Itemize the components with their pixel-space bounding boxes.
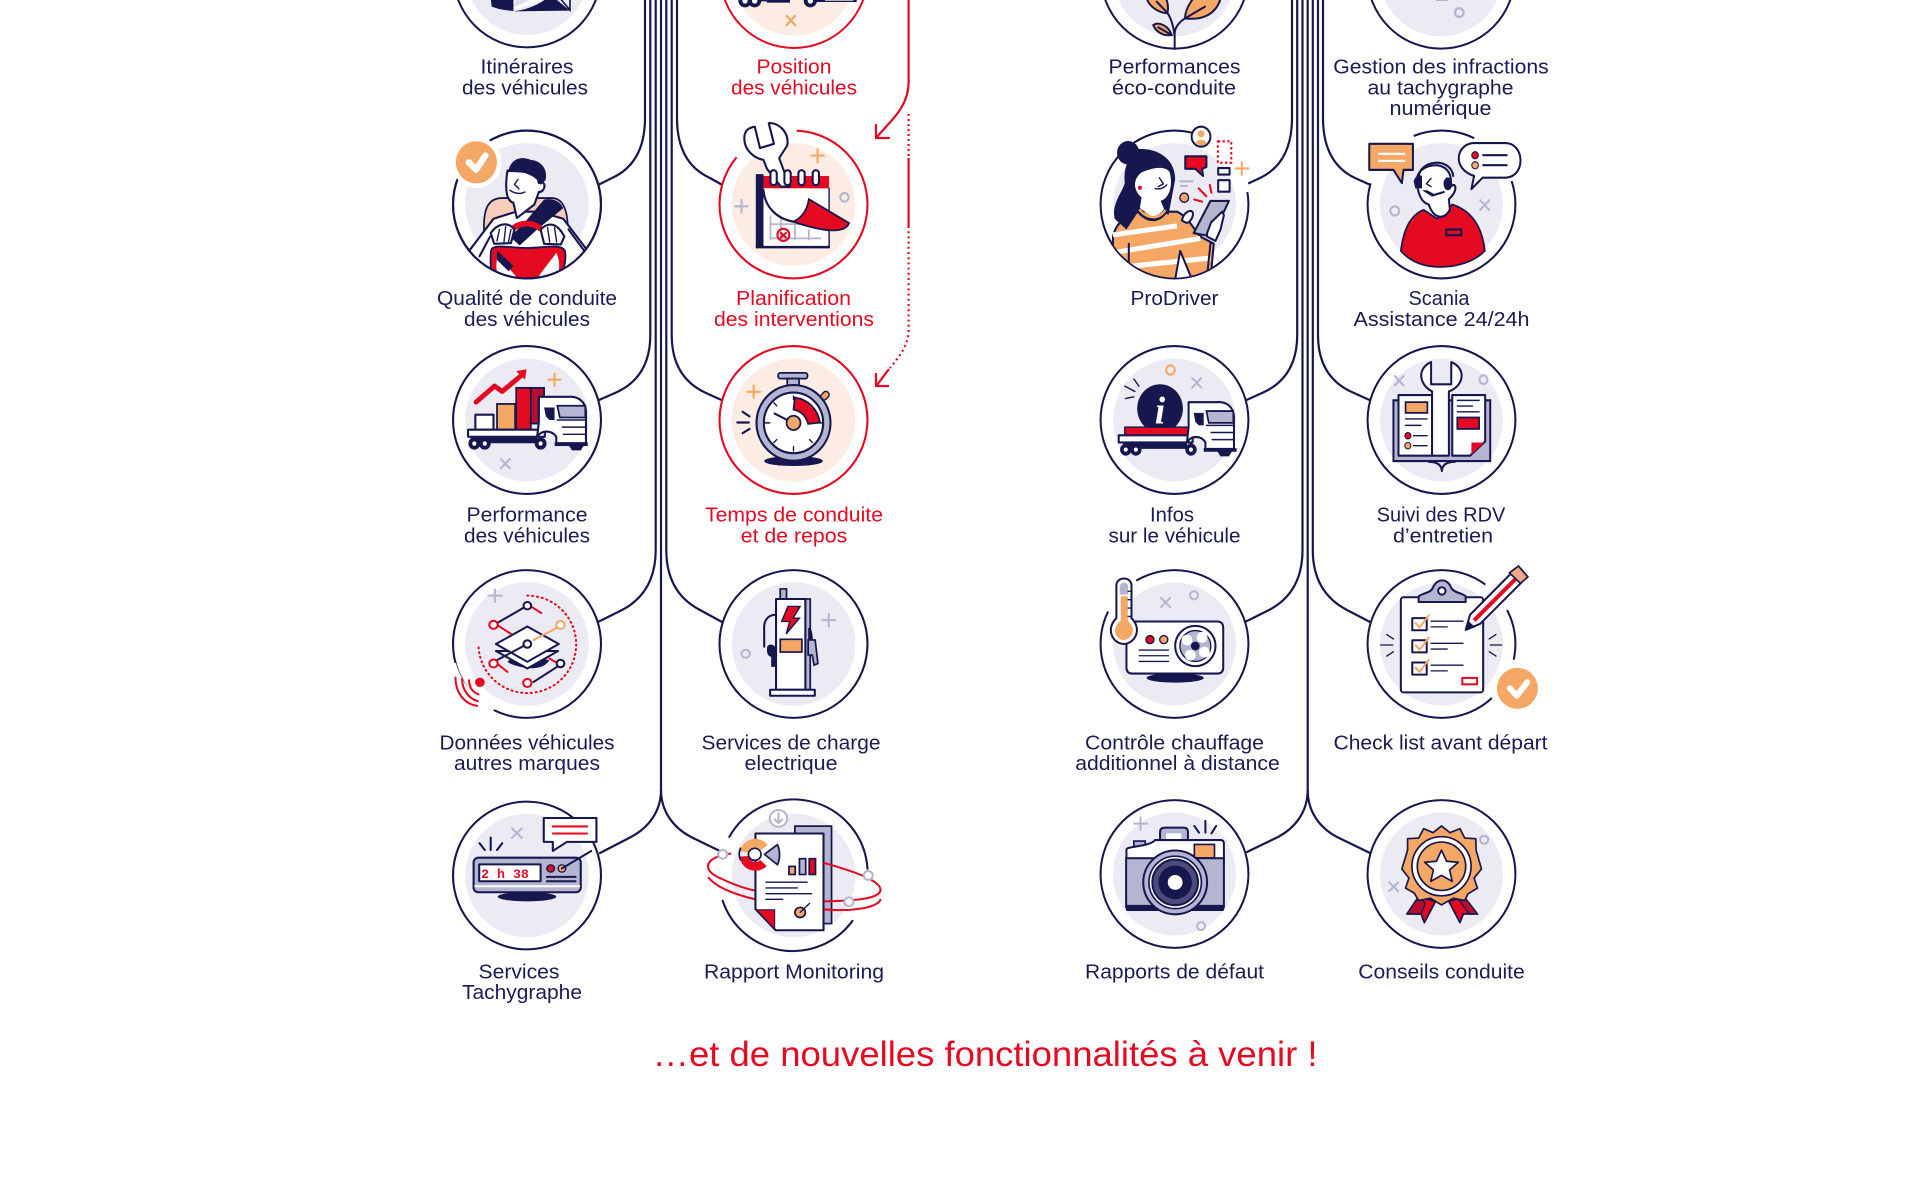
panel: Services de charge electrique bbox=[702, 570, 880, 775]
label: numérique bbox=[1390, 98, 1492, 120]
icon: clipboard checklist with pencil bbox=[1368, 566, 1542, 718]
arrow: planification to temps de conduite bbox=[876, 114, 909, 386]
label: additionnel à distance bbox=[1075, 753, 1280, 775]
label: Qualité de conduite bbox=[437, 288, 617, 310]
icon: stopwatch bbox=[720, 346, 867, 494]
label: des interventions bbox=[714, 309, 874, 331]
label: Services bbox=[478, 961, 560, 983]
label: sur le véhicule bbox=[1108, 526, 1240, 548]
icon: data layers bbox=[453, 570, 601, 718]
arrow: position to planification bbox=[876, 0, 909, 138]
icon: award rosette bbox=[1368, 800, 1515, 948]
label: autres marques bbox=[454, 753, 600, 775]
label: electrique bbox=[744, 753, 838, 775]
label: Contrôle chauffage bbox=[1085, 732, 1264, 754]
closing headline: …et de nouvelles fonctionnalités à venir ! bbox=[652, 1035, 1318, 1074]
icon: calendar and wrench bbox=[720, 123, 867, 278]
label: et de repos bbox=[741, 526, 847, 548]
panel: Check list avant départ bbox=[1334, 566, 1548, 754]
label: Conseils conduite bbox=[1358, 961, 1525, 983]
label: Check list avant départ bbox=[1334, 732, 1548, 754]
panel: Suivi des RDV d'entretien bbox=[1368, 346, 1515, 548]
panel: Rapports de défaut bbox=[1085, 800, 1264, 983]
label: Gestion des infractions bbox=[1333, 56, 1549, 78]
panel: Conseils conduite bbox=[1358, 800, 1525, 983]
panel: Performances éco-conduite bbox=[1101, 0, 1248, 99]
label: d’entretien bbox=[1393, 526, 1493, 548]
label: Assistance 24/24h bbox=[1354, 309, 1530, 331]
panel: ProDriver bbox=[1101, 127, 1248, 310]
label: éco-conduite bbox=[1112, 77, 1236, 99]
panel: Rapport Monitoring bbox=[704, 799, 884, 983]
panel: Contrôle chauffage additionnel bbox=[1075, 570, 1280, 775]
icon: tachograph device bbox=[453, 802, 601, 949]
label: Position bbox=[756, 56, 832, 78]
label: Suivi des RDV bbox=[1377, 505, 1506, 527]
icon: report with orbit bbox=[708, 799, 880, 951]
panel: Planification des interventions bbox=[714, 123, 874, 331]
label: Temps de conduite bbox=[705, 505, 883, 527]
icon: tachograph device: 2 h 38 bbox=[481, 867, 529, 882]
panel: Gestion des infractions bbox=[1333, 0, 1549, 120]
panel: Qualité de conduite bbox=[437, 131, 617, 331]
icon: charging station bbox=[720, 570, 867, 718]
panel: Scania Assistance 24/24h bbox=[1354, 131, 1530, 331]
label: Performance bbox=[466, 505, 588, 527]
icon: thermometer and heater bbox=[1101, 570, 1248, 718]
panel: Infos sur le véhicule bbox=[1101, 346, 1248, 548]
label: Scania bbox=[1408, 288, 1470, 310]
label: Rapports de défaut bbox=[1085, 961, 1264, 983]
label: des véhicules bbox=[731, 77, 857, 99]
icon: folded map bbox=[453, 0, 601, 47]
label: Tachygraphe bbox=[462, 982, 582, 1004]
connector tree: left trunk bbox=[598, 0, 726, 854]
label: Rapport Monitoring bbox=[704, 961, 884, 983]
label: au tachygraphe bbox=[1368, 77, 1514, 99]
icon: plant bbox=[1101, 0, 1248, 49]
panel: Itinéraires des véhicules bbox=[453, 0, 601, 99]
icon: woman with smartphone bbox=[1101, 127, 1248, 279]
label: Données véhicules bbox=[440, 732, 614, 754]
icon: camera bbox=[1101, 800, 1248, 948]
label: Services de charge bbox=[702, 732, 880, 754]
label: Itinéraires bbox=[480, 56, 574, 78]
connector tree: right trunk bbox=[1245, 0, 1370, 853]
icon: support agent with headset bbox=[1368, 131, 1521, 278]
label: Infos bbox=[1150, 505, 1194, 527]
label: Planification bbox=[736, 288, 851, 310]
icon: info badge on truck: i bbox=[1155, 390, 1166, 433]
icon: driver at steering wheel bbox=[451, 131, 601, 283]
icon: vehicle position bbox=[720, 0, 868, 48]
icon: truck with growth arrow bbox=[453, 346, 601, 494]
icon: info badge on truck bbox=[1101, 346, 1248, 494]
panel: Position des véhicules bbox=[720, 0, 868, 99]
panel: Données véhicules autres marques bbox=[440, 570, 614, 775]
label: des véhicules bbox=[462, 77, 588, 99]
panel: Performance des véhicules bbox=[453, 346, 601, 548]
icon: maintenance book and wrench bbox=[1368, 346, 1515, 494]
label: des véhicules bbox=[464, 526, 590, 548]
label: ProDriver bbox=[1130, 288, 1219, 310]
panel: Temps de conduite et de repos bbox=[705, 346, 883, 548]
panel: Services Tachygraphe bbox=[453, 802, 601, 1004]
icon: tachograph infractions bbox=[1367, 0, 1515, 49]
label: des véhicules bbox=[464, 309, 590, 331]
label: Performances bbox=[1108, 56, 1240, 78]
